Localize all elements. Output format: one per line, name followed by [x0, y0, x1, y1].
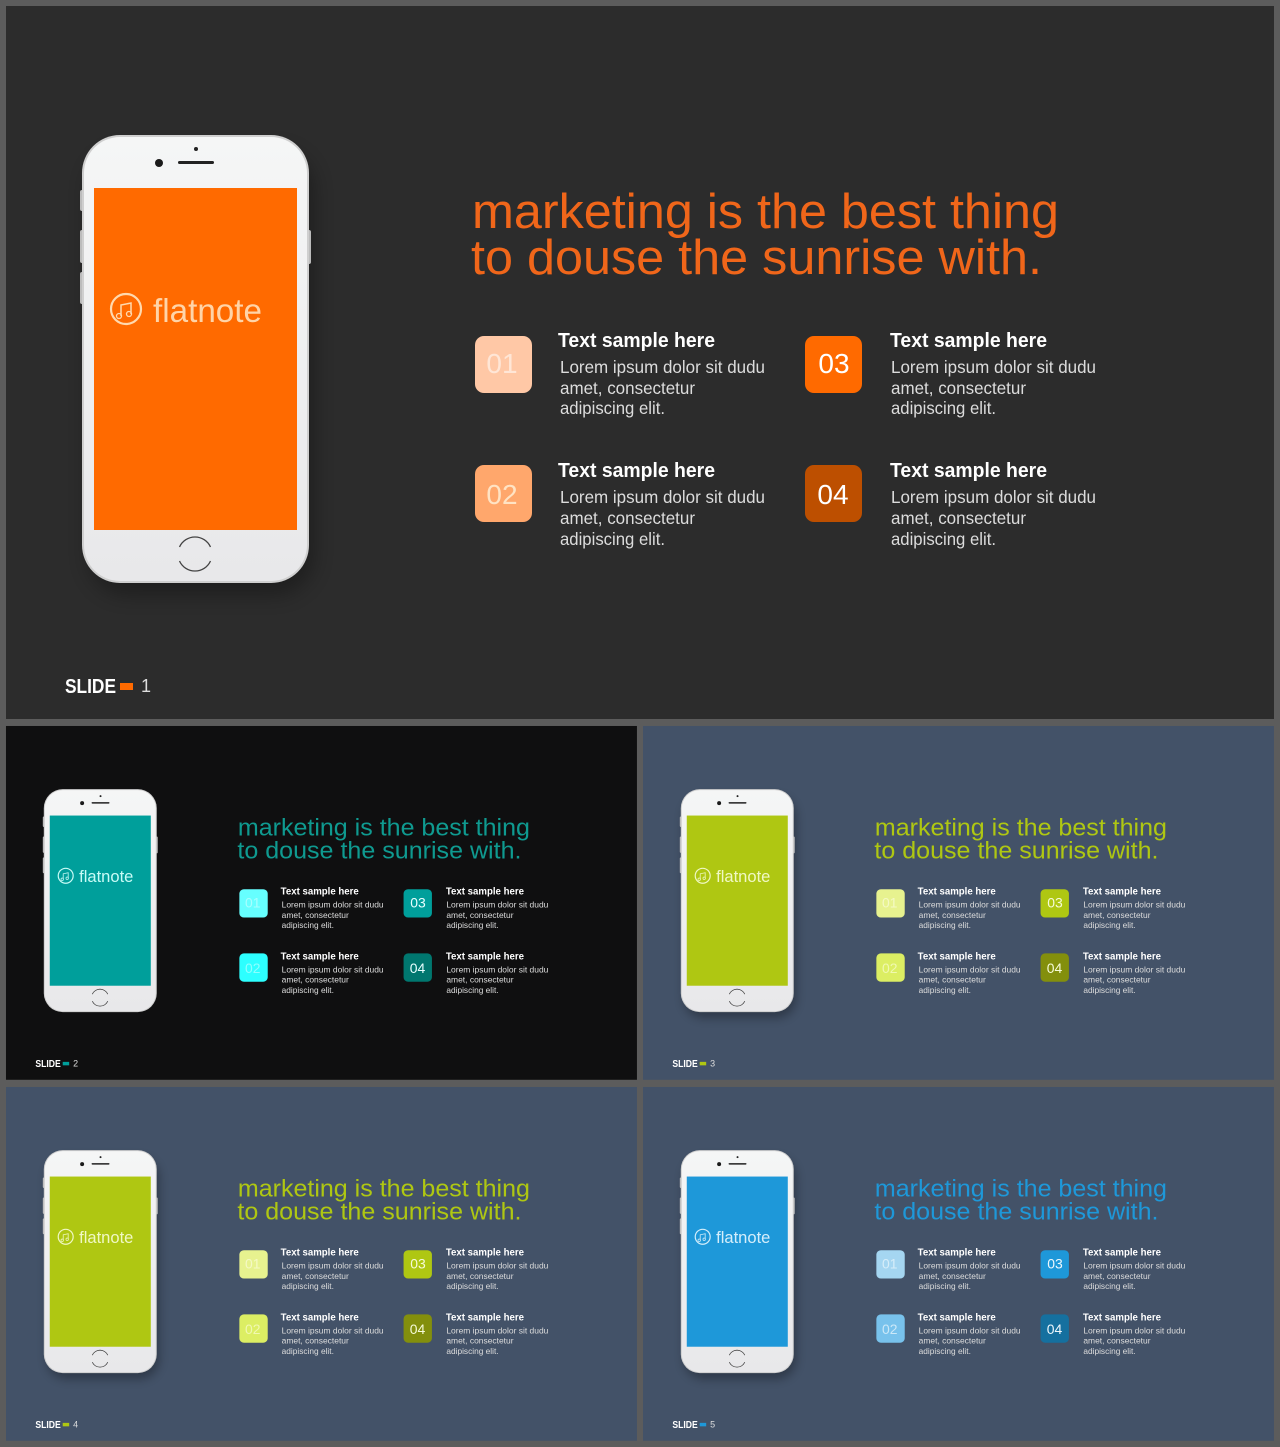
item 01: adipiscing elit.: [560, 398, 665, 418]
title: [471, 185, 1059, 285]
item 02: Text sample here: [281, 951, 359, 962]
item 01: adipiscing elit.: [282, 1281, 334, 1291]
item 03: adipiscing elit.: [446, 1281, 499, 1291]
icon: phone mockup: [680, 789, 796, 1018]
item 02: Text sample here: [281, 1312, 359, 1323]
item 01: 01: [245, 895, 261, 911]
item 03: 03: [1047, 1256, 1063, 1272]
panel: slide 5: [643, 1087, 1274, 1441]
item 02: 02: [486, 479, 518, 510]
slide number: SLIDE: [65, 676, 116, 698]
item 02: Lorem ipsum dolor sit dudu: [282, 1325, 384, 1335]
item 04: amet, consectetur: [891, 508, 1026, 528]
slide number: SLIDE: [35, 1420, 61, 1431]
title: [874, 1175, 1167, 1225]
item 03: 03: [1047, 895, 1063, 911]
item 04: Lorem ipsum dolor sit dudu: [1083, 1325, 1186, 1335]
item 04: 04: [410, 960, 425, 976]
slide number: 2: [73, 1058, 78, 1068]
item 01: Text sample here: [918, 1248, 996, 1259]
slide number: 4: [73, 1419, 78, 1429]
item 03: adipiscing elit.: [1083, 1281, 1136, 1291]
slide number: SLIDE: [672, 1059, 698, 1070]
item 04: amet, consectetur: [446, 975, 514, 985]
icon: phone mockup: [80, 135, 314, 595]
title: marketing is the best thing: [238, 1175, 530, 1202]
item 04: Text sample here: [1083, 1312, 1161, 1323]
item 02: 02: [882, 1321, 898, 1337]
item 01: 01: [245, 1256, 261, 1272]
item 04: [1041, 1312, 1186, 1356]
icon: phone mockup: flatnote: [716, 1229, 770, 1247]
item 02: Lorem ipsum dolor sit dudu: [560, 487, 765, 507]
item 02: Text sample here: [558, 460, 715, 482]
item 04: Lorem ipsum dolor sit dudu: [891, 487, 1096, 507]
item 02: Lorem ipsum dolor sit dudu: [282, 964, 384, 974]
item 03: Text sample here: [890, 330, 1047, 352]
item 04: Lorem ipsum dolor sit dudu: [1083, 964, 1186, 974]
item 02: amet, consectetur: [282, 1336, 349, 1346]
item 03: amet, consectetur: [891, 378, 1026, 398]
item 02: 02: [245, 1321, 261, 1337]
title: to douse the sunrise with.: [874, 837, 1158, 864]
item 01: 01: [882, 895, 898, 911]
item 01: Text sample here: [281, 1248, 359, 1259]
title: [874, 814, 1167, 864]
item 03: amet, consectetur: [1083, 1271, 1151, 1281]
title: marketing is the best thing: [875, 814, 1167, 841]
item 02: amet, consectetur: [282, 975, 349, 985]
item 03: Lorem ipsum dolor sit dudu: [891, 357, 1096, 377]
item 01: amet, consectetur: [919, 910, 986, 920]
item 02: [475, 460, 765, 549]
item 01: amet, consectetur: [560, 378, 695, 398]
item 04: adipiscing elit.: [446, 1346, 499, 1356]
item 03: [805, 330, 1096, 418]
item 02: [239, 1312, 384, 1356]
item 02: amet, consectetur: [919, 1336, 986, 1346]
item 04: adipiscing elit.: [1083, 1346, 1136, 1356]
item 01: amet, consectetur: [919, 1271, 986, 1281]
item 01: adipiscing elit.: [282, 920, 334, 930]
item 01: [239, 1248, 384, 1291]
title: marketing is the best thing: [238, 814, 530, 841]
title: marketing is the best thing: [472, 185, 1059, 239]
item 03: Text sample here: [1083, 1248, 1161, 1259]
item 04: Text sample here: [446, 951, 524, 962]
item 02: adipiscing elit.: [560, 529, 665, 549]
item 01: Lorem ipsum dolor sit dudu: [560, 357, 765, 377]
item 02: [239, 951, 384, 995]
item 02: amet, consectetur: [560, 508, 695, 528]
item 03: adipiscing elit.: [446, 920, 499, 930]
panel: slide 4: [6, 1087, 637, 1441]
title: to douse the sunrise with.: [471, 231, 1042, 285]
item 01: 01: [486, 348, 518, 379]
item 03: [404, 887, 549, 930]
item 02: 02: [245, 960, 261, 976]
item 03: 03: [410, 1256, 426, 1272]
item 03: amet, consectetur: [446, 910, 514, 920]
item 01: Text sample here: [918, 887, 996, 898]
item 01: adipiscing elit.: [919, 1281, 971, 1291]
item 01: [475, 330, 765, 418]
item 04: 04: [817, 479, 849, 510]
item 02: adipiscing elit.: [282, 985, 334, 995]
item 02: [876, 951, 1021, 995]
item 01: Lorem ipsum dolor sit dudu: [282, 900, 384, 910]
icon: phone mockup: [43, 1150, 159, 1379]
item 03: Lorem ipsum dolor sit dudu: [446, 900, 549, 910]
item 03: Lorem ipsum dolor sit dudu: [1083, 900, 1186, 910]
item 03: Text sample here: [446, 887, 524, 898]
item 02: [876, 1312, 1021, 1356]
item 02: Text sample here: [918, 1312, 996, 1323]
item 04: amet, consectetur: [446, 1336, 514, 1346]
slide number: [672, 1419, 715, 1431]
item 03: Lorem ipsum dolor sit dudu: [1083, 1261, 1186, 1271]
title: to douse the sunrise with.: [237, 837, 521, 864]
item 04: 04: [1047, 960, 1062, 976]
slide number: [65, 676, 151, 698]
icon: phone mockup: flatnote: [716, 868, 770, 886]
item 03: amet, consectetur: [446, 1271, 514, 1281]
item 04: [1041, 951, 1186, 995]
item 03: Lorem ipsum dolor sit dudu: [446, 1261, 549, 1271]
item 01: amet, consectetur: [282, 910, 349, 920]
item 02: Lorem ipsum dolor sit dudu: [919, 1325, 1021, 1335]
slide number: 1: [141, 676, 151, 696]
item 03: [404, 1248, 549, 1291]
item 01: [876, 1248, 1021, 1291]
title: marketing is the best thing: [875, 1175, 1167, 1202]
panel: slide 3: [643, 726, 1274, 1080]
item 02: Lorem ipsum dolor sit dudu: [919, 964, 1021, 974]
title: to douse the sunrise with.: [874, 1198, 1158, 1225]
title: to douse the sunrise with.: [237, 1198, 521, 1225]
item 01: Lorem ipsum dolor sit dudu: [282, 1261, 384, 1271]
icon: phone mockup: [43, 789, 158, 1012]
item 02: Text sample here: [918, 951, 996, 962]
item 04: [404, 1312, 549, 1356]
item 01: amet, consectetur: [282, 1271, 349, 1281]
title: [237, 814, 530, 864]
item 04: amet, consectetur: [1083, 975, 1151, 985]
panel: slide 2: [6, 726, 637, 1080]
item 04: adipiscing elit.: [891, 529, 996, 549]
item 03: amet, consectetur: [1083, 910, 1151, 920]
item 04: Text sample here: [446, 1312, 524, 1323]
panel: slide 1: [6, 6, 1274, 719]
item 04: Text sample here: [1083, 951, 1161, 962]
slide number: SLIDE: [35, 1059, 61, 1070]
item 01: [876, 887, 1021, 930]
item 01: Lorem ipsum dolor sit dudu: [919, 900, 1021, 910]
icon: phone mockup: flatnote: [79, 1229, 133, 1247]
title: [237, 1175, 530, 1225]
icon: phone mockup: flatnote: [153, 292, 262, 329]
slide number: [672, 1058, 715, 1070]
item 04: Text sample here: [890, 460, 1047, 482]
item 04: adipiscing elit.: [1083, 985, 1136, 995]
item 01: 01: [882, 1256, 898, 1272]
item 01: adipiscing elit.: [919, 920, 971, 930]
item 04: amet, consectetur: [1083, 1336, 1151, 1346]
slide number: 5: [710, 1419, 715, 1429]
item 03: adipiscing elit.: [1083, 920, 1136, 930]
item 03: Text sample here: [1083, 887, 1161, 898]
item 04: 04: [410, 1321, 425, 1337]
item 02: amet, consectetur: [919, 975, 986, 985]
icon: phone mockup: flatnote: [79, 868, 133, 886]
item 02: adipiscing elit.: [919, 1346, 971, 1356]
item 04: adipiscing elit.: [446, 985, 499, 995]
item 02: adipiscing elit.: [919, 985, 971, 995]
icon: phone mockup: [680, 1150, 796, 1379]
item 04: [404, 951, 549, 995]
item 04: [805, 460, 1096, 549]
item 03: 03: [410, 895, 426, 911]
item 03: [1041, 1248, 1186, 1291]
item 02: adipiscing elit.: [282, 1346, 334, 1356]
item 02: 02: [882, 960, 898, 976]
item 01: [239, 887, 384, 930]
slide number: SLIDE: [672, 1420, 698, 1431]
item 04: Lorem ipsum dolor sit dudu: [446, 1325, 549, 1335]
slide number: 3: [710, 1058, 715, 1068]
item 03: adipiscing elit.: [891, 398, 996, 418]
item 03: 03: [818, 348, 850, 379]
item 01: Text sample here: [281, 887, 359, 898]
item 03: [1041, 887, 1186, 930]
slide number: [35, 1419, 78, 1431]
item 04: 04: [1047, 1321, 1062, 1337]
slide number: [35, 1058, 78, 1070]
item 04: Lorem ipsum dolor sit dudu: [446, 964, 549, 974]
item 01: Text sample here: [558, 330, 715, 352]
item 03: Text sample here: [446, 1248, 524, 1259]
item 01: Lorem ipsum dolor sit dudu: [919, 1261, 1021, 1271]
